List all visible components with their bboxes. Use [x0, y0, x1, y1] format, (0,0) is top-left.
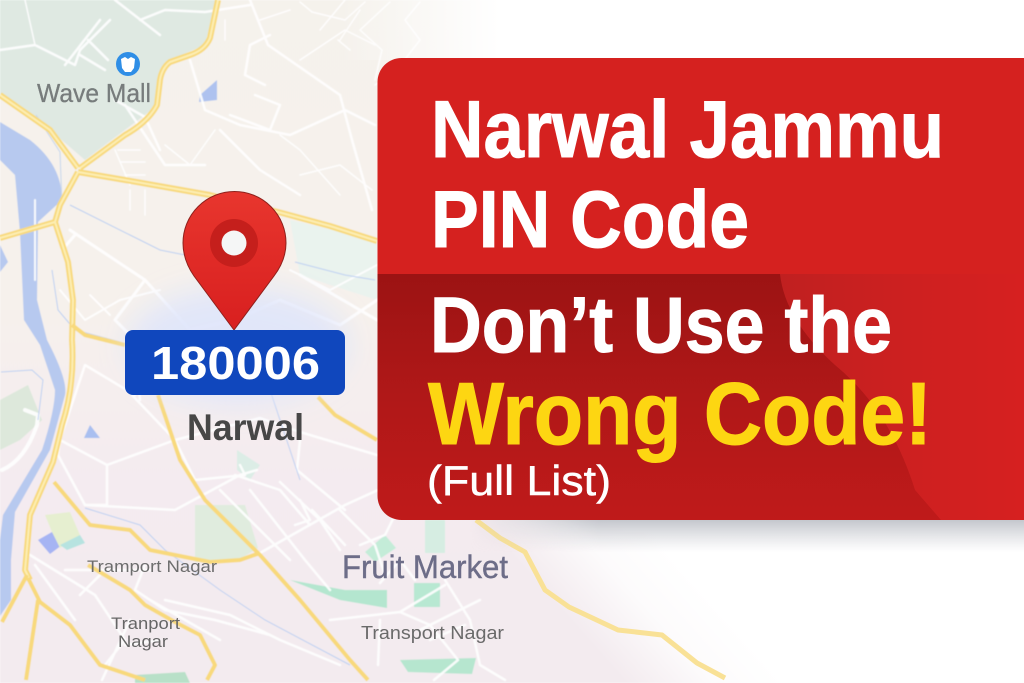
red title panel — [378, 58, 1024, 520]
warning line 1: Don’t Use the — [430, 280, 892, 369]
map area: thin blue waterways — [1, 205, 375, 665]
label: Tranport Nagar: Tranport — [111, 614, 180, 633]
label: Tramport Nagar: Tramport Nagar — [87, 557, 217, 576]
label: Tranport Nagar — [111, 614, 180, 651]
panel: lighter curved area — [780, 274, 1024, 520]
title line 1: Narwal Jammu — [431, 85, 944, 175]
map area: white local roads — [0, 0, 505, 680]
map area: green park — [0, 0, 216, 160]
label: Narwal: Narwal — [187, 407, 304, 448]
PIN code number: 180006 — [151, 337, 320, 389]
label: Wave Mall: Wave Mall — [37, 78, 151, 108]
panel: lower section — [378, 274, 1024, 520]
label: Transport Nagar: Transport Nagar — [361, 623, 504, 643]
warning line 2 highlighted: Wrong Code! — [428, 364, 932, 463]
panel: upper section — [378, 58, 1024, 275]
title line 2: PIN Code — [431, 175, 749, 265]
map area: white fade along the top — [340, 0, 1024, 60]
map area: glow behind location badge — [128, 287, 348, 403]
subtitle: (Full List) — [427, 457, 611, 504]
map area: road fading out under the panel — [476, 520, 725, 678]
icon: mall marker — [116, 52, 140, 76]
map area: yellow main roads — [0, 0, 377, 680]
label: Tranport Nagar: Nagar — [118, 632, 168, 651]
map area: white behind the panel — [560, 58, 1024, 520]
PIN code badge — [125, 330, 345, 395]
map area: white fade below the panel — [380, 518, 1024, 683]
map area: small water and building blocks — [199, 80, 217, 102]
panel shadow — [491, 520, 1024, 546]
map area: river — [0, 122, 65, 616]
label: Fruit Market: Fruit Market — [342, 549, 508, 585]
icon: location pin — [183, 192, 286, 330]
